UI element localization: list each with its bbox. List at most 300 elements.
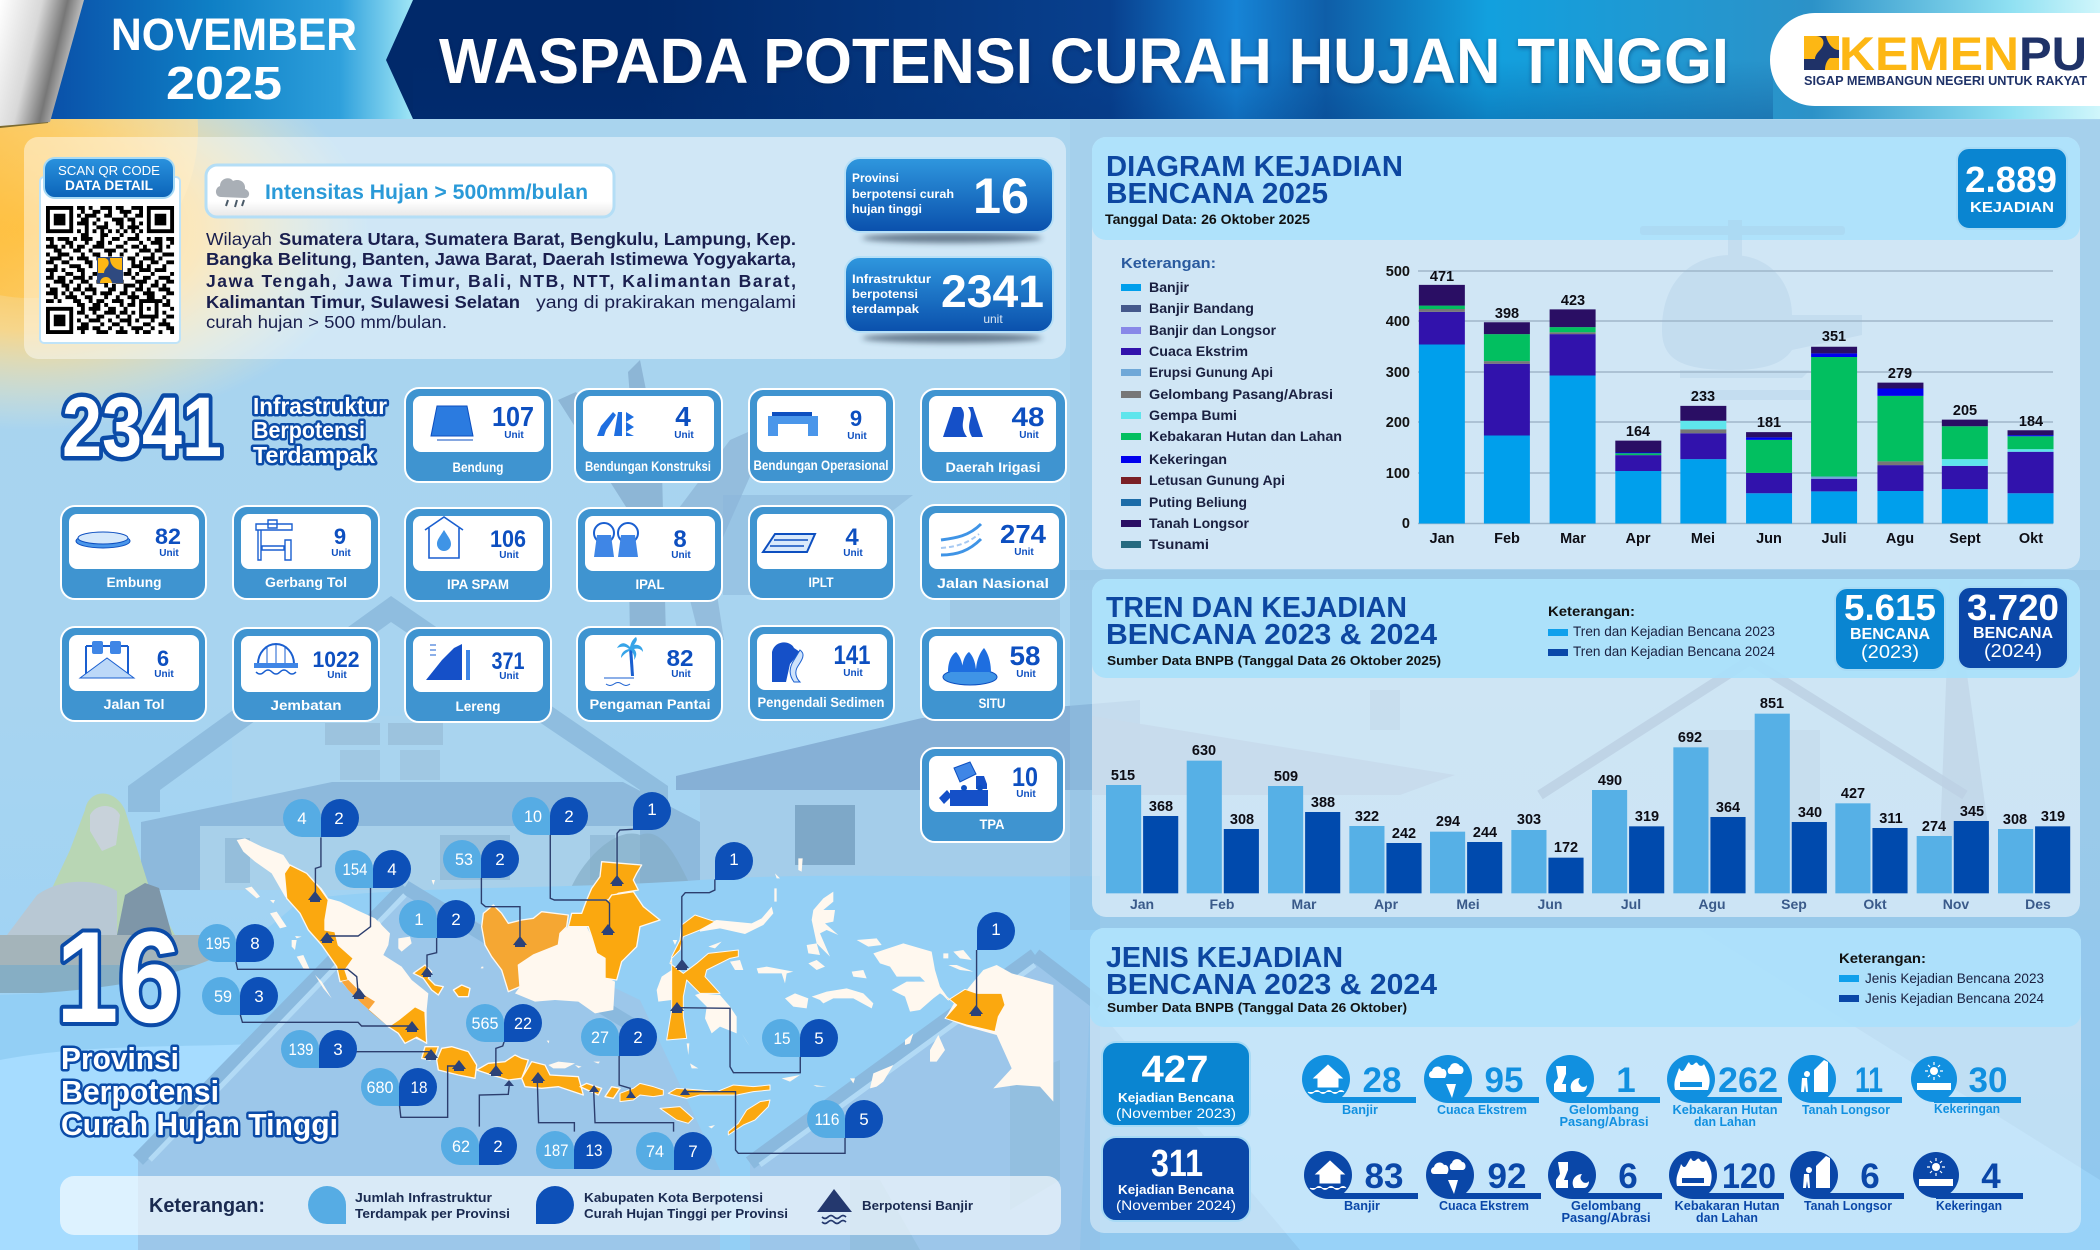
text: affected provinces: yang di prakirakan mengalami: [536, 292, 796, 312]
month block: [45, 0, 413, 119]
badge: 427 November 2023: Kejadian Bencana: [1118, 1090, 1235, 1105]
card: Lereng: Unit: [499, 671, 519, 682]
heading: Tanggal Data: 26 Oktober 2025: [1105, 211, 1310, 227]
pin: 187/13: 187: [544, 1141, 568, 1160]
legend: Keterangan:: [1839, 950, 1926, 966]
month labels: Feb: [1210, 896, 1234, 912]
card: Pengendali Sedimen: [749, 626, 894, 720]
item: Cuaca Ekstrem 2024: [1426, 1151, 1541, 1213]
legend: flood icon: [817, 1189, 973, 1224]
card: IPAL: Unit: [671, 550, 691, 561]
pin: 139/3: [281, 1030, 357, 1068]
legend: Gelombang Pasang/Abrasi: [1149, 386, 1333, 402]
card: Bendung: [405, 388, 552, 482]
item: Banjir 2024: Banjir: [1344, 1199, 1380, 1213]
icon: storm clouds: [1431, 1159, 1466, 1194]
card: IPLT: 4: [845, 524, 859, 551]
item: Gelombang Pasang/Abrasi 2023: Pasang/Abrasi: [1560, 1115, 1648, 1129]
badge: 427 November 2023: 427: [1142, 1049, 1208, 1091]
item: Cuaca Ekstrem 2023: [1424, 1055, 1539, 1117]
QR code: [46, 206, 174, 334]
item: Tanah Longsor 2023: [1788, 1055, 1902, 1117]
item: Kekeringan 2023: Kekeringan: [1934, 1102, 2000, 1116]
text: affected provinces: Jawa Tengah, Jawa Timur, Bali, NTB, NTT, Kalimantan Barat,: [206, 271, 796, 291]
card: SITU: [921, 628, 1064, 720]
stat card: 2341 infrastruktur: terdampak: [852, 302, 919, 316]
card: TPA: Unit: [1016, 789, 1036, 800]
heading: [1106, 592, 1441, 668]
card: Pengaman Pantai: Pengaman Pantai: [590, 697, 710, 712]
value labels: 279: [1888, 366, 1912, 382]
value labels: 515: [1111, 768, 1135, 784]
card: IPAL: [577, 508, 722, 601]
badge: 311 November 2024: Kejadian Bencana: [1118, 1182, 1235, 1197]
western islands: [237, 838, 660, 1098]
legend: [1839, 950, 2044, 1006]
month labels: Des: [2025, 896, 2051, 912]
badge: 311 November 2024: [1102, 1137, 1250, 1221]
item: Kebakaran Hutan 2024: 120: [1722, 1157, 1776, 1196]
item: Kekeringan 2024: 4: [1981, 1157, 2001, 1196]
card: Jalan Tol: Unit: [154, 669, 174, 680]
card: Pengendali Sedimen: Unit: [843, 668, 863, 679]
card: SITU: 58: [1010, 641, 1040, 671]
value labels: 308: [2003, 812, 2027, 828]
badge: 2.889 kejadian: [1957, 148, 2067, 229]
grouped bar chart: [1106, 696, 2070, 912]
item: Kekeringan 2024: [1913, 1152, 2023, 1213]
axis labels: 100: [1386, 466, 1410, 482]
legend: Banjir Bandang: [1149, 300, 1254, 316]
QR card: [40, 158, 180, 343]
pin: 53/2: 53: [455, 850, 473, 869]
heading: 2341 infrastruktur: Berpotensi: [253, 417, 365, 443]
value labels: [1430, 269, 2043, 440]
item: Kekeringan 2024: Kekeringan: [1936, 1199, 2002, 1213]
icon: wave: [1554, 1066, 1587, 1092]
value labels: 851: [1760, 696, 1784, 712]
badge: 3.720: [1958, 587, 2068, 669]
pin: single 1 Sulawesi: 1: [729, 850, 739, 869]
left woman, pets and boat: [0, 935, 227, 993]
value labels: 423: [1561, 293, 1585, 309]
intensity pill: Intensitas Hujan > 500mm/bulan: [265, 181, 588, 204]
card: SITU: SITU: [978, 696, 1006, 711]
icon: dam: [431, 406, 473, 440]
legend: kabupaten kota: [536, 1186, 788, 1224]
heading: [1106, 942, 1437, 1015]
pin: 59/3: 3: [254, 987, 264, 1006]
badge: 3.720: (2024): [1984, 641, 2042, 661]
month labels: Agu: [1698, 896, 1726, 912]
stat card: 16 provinsi: hujan tinggi: [852, 202, 922, 216]
pin: 62/2: 2: [493, 1137, 503, 1156]
legend: Erupsi Gunung Api: [1149, 364, 1273, 380]
heading: [1105, 151, 1403, 227]
item: Kebakaran Hutan 2024: Kebakaran Hutan: [1674, 1199, 1780, 1213]
decorative right side shapes: [1070, 120, 2100, 580]
decorative trees and houses: [558, 360, 666, 640]
badge: 311 November 2024: (November 2024): [1116, 1197, 1236, 1213]
item: Tanah Longsor 2024: [1790, 1151, 1904, 1213]
item: Gelombang Pasang/Abrasi 2024: 6: [1618, 1157, 1638, 1196]
logo: KEMEN: [1839, 27, 2019, 80]
icon: dam construction: [597, 412, 634, 436]
pin: 74/7: 7: [688, 1142, 698, 1161]
pin: 187/13: 13: [586, 1141, 602, 1160]
pin: 15/5: 15: [774, 1029, 790, 1048]
value labels: 364: [1716, 800, 1740, 816]
axis labels: 500: [1386, 264, 1410, 280]
card: Pengaman Pantai: Unit: [671, 669, 691, 680]
card: IPA SPAM: Unit: [499, 550, 519, 561]
panel: diagram kejadian bencana 2025: [1092, 137, 2080, 569]
value labels: 319: [1635, 809, 1659, 825]
item: Tanah Longsor 2024: Tanah Longsor: [1804, 1199, 1892, 1213]
value labels: 172: [1554, 840, 1578, 856]
icon: road: [941, 524, 981, 555]
card: Daerah Irigasi: [921, 389, 1066, 482]
icon: landslide: [1803, 1156, 1830, 1188]
leader lines: [236, 829, 977, 1153]
item: Kekeringan 2023: [1911, 1056, 2021, 1116]
map of Indonesia: [198, 792, 1053, 1170]
faint helicopter: [1640, 220, 1862, 400]
heading: Sumber Data BNPB (Tanggal Data 26 Oktober 2025): [1107, 653, 1441, 668]
badge: 427 November 2023: (November 2023): [1116, 1105, 1236, 1121]
panel header: [1090, 928, 2081, 1027]
axis labels: 300: [1386, 365, 1410, 381]
bars: [1419, 285, 2054, 524]
badge: 311 November 2024: 311: [1151, 1143, 1203, 1185]
item: Banjir 2024: 83: [1364, 1157, 1404, 1196]
legend: Gempa Bumi: [1149, 407, 1237, 423]
card: Jalan Tol: [61, 627, 206, 721]
icon: palm beach: [629, 646, 634, 676]
card: Jalan Nasional: Unit: [1014, 547, 1034, 558]
legend: Banjir dan Longsor: [1149, 322, 1277, 338]
stat card: 2341 infrastruktur: berpotensi: [852, 287, 918, 301]
badge: 5.615: [1835, 587, 1945, 670]
page curl: [0, 0, 84, 128]
pin: 1/2: 1: [414, 910, 424, 929]
legend: Kekeringan: [1149, 451, 1227, 467]
pin: 10/2: 2: [564, 807, 574, 826]
pin: 10/2: [512, 797, 588, 835]
pin: 59/3: 59: [214, 987, 232, 1006]
logo: SIGAP MEMBANGUN NEGERI UNTUK RAKYAT: [1804, 73, 2087, 88]
legend: [1548, 603, 1775, 659]
item: Kekeringan 2023: 30: [1968, 1061, 2008, 1100]
heading: 2341 infrastruktur: [62, 380, 387, 474]
text: affected provinces: curah hujan > 500 mm/bulan.: [206, 312, 447, 332]
card: Gerbang Tol: 9: [334, 524, 346, 549]
month labels: Mar: [1292, 896, 1317, 912]
stat card: 16 provinsi: 16: [973, 168, 1029, 224]
icon: rain cloud: [216, 178, 249, 207]
stat card: 2341 infrastruktur: Infrastruktur: [852, 272, 931, 286]
pin: 10/2: 10: [524, 807, 542, 826]
item: Gelombang Pasang/Abrasi 2023: 1: [1616, 1061, 1636, 1100]
panel: jenis kejadian bencana: [1090, 928, 2081, 1233]
pin: single 1 Kaltim: 1: [647, 800, 657, 819]
month labels: Sept: [1949, 531, 1981, 547]
item: Kebakaran Hutan 2024: dan Lahan: [1696, 1211, 1758, 1225]
panel header: [1092, 579, 2080, 678]
value labels: 233: [1691, 389, 1715, 405]
month labels: Sep: [1781, 896, 1807, 912]
logo: [1770, 13, 2100, 106]
badge: 5.615: 5.615: [1844, 587, 1936, 628]
flood markers: [308, 875, 983, 1098]
card: Jembatan: Jembatan: [270, 698, 342, 713]
item: Cuaca Ekstrem 2023: 95: [1484, 1061, 1524, 1100]
value labels: 294: [1436, 814, 1460, 830]
stat card: 2341 infrastruktur: unit: [983, 312, 1003, 326]
card: Jembatan: [233, 628, 379, 721]
pin: 53/2: 2: [495, 850, 505, 869]
item: Gelombang Pasang/Abrasi 2023: [1546, 1055, 1660, 1129]
month block: NOVEMBER: [111, 9, 357, 60]
card: TPA: TPA: [980, 817, 1005, 832]
pin: 1/2: [399, 900, 475, 938]
card: Pengaman Pantai: 82: [666, 645, 694, 671]
card: Pengendali Sedimen: Pengendali Sedimen: [758, 695, 884, 710]
card: Jalan Tol: Jalan Tol: [104, 697, 164, 712]
row: jenis kejadian 2024: [1304, 1151, 2023, 1225]
card: Bendungan Konstruksi: Unit: [674, 430, 694, 441]
card: Bendungan Konstruksi: [575, 389, 722, 482]
card: Lereng: 371: [492, 648, 524, 675]
pin: 27/2: 2: [633, 1028, 643, 1047]
card: Daerah Irigasi: Unit: [1019, 430, 1039, 441]
value labels: 340: [1798, 805, 1822, 821]
pin: single 1 Papua: [977, 912, 1015, 950]
item: Kebakaran Hutan 2023: Kebakaran Hutan: [1672, 1103, 1778, 1117]
icon: operating dam: [768, 416, 818, 436]
icon: sludge plant: [763, 534, 815, 552]
pin: Sumut 4/2: 4: [297, 809, 307, 828]
item: Tanah Longsor 2024: 6: [1860, 1157, 1880, 1196]
pin: 15/5: 5: [814, 1029, 824, 1048]
item: Banjir 2024: [1304, 1151, 1418, 1213]
icon: sediment control: [772, 642, 800, 682]
flood water: [0, 876, 1100, 1250]
item: Banjir 2023: Banjir: [1342, 1103, 1378, 1117]
card: Jalan Tol: 6: [157, 646, 169, 671]
heading: 2341 infrastruktur: 2341: [62, 380, 222, 474]
value labels: 490: [1598, 773, 1622, 789]
legend: Letusan Gunung Api: [1149, 472, 1285, 488]
card: Bendungan Operasional: Bendungan Operasional: [754, 458, 888, 473]
text: affected provinces: [206, 229, 796, 332]
legend: Keterangan:: [1548, 603, 1635, 619]
month labels: Jul: [1621, 896, 1641, 912]
value labels: 181: [1757, 415, 1781, 431]
icon: lake with trees: [943, 669, 997, 685]
pin: 680/18: 18: [410, 1078, 428, 1097]
pin: 116/5: 116: [814, 1110, 840, 1129]
card: Embung: [61, 506, 206, 599]
pin: 154/4: [335, 850, 411, 888]
legend: Banjir: [1149, 279, 1190, 295]
icon: forest fire: [1674, 1062, 1710, 1090]
axis labels: [1386, 264, 1410, 532]
text: affected provinces: Wilayah: [206, 229, 272, 249]
stat card: 16 provinsi: berpotensi curah: [852, 187, 954, 201]
item: Cuaca Ekstrem 2023: Cuaca Ekstrem: [1437, 1103, 1527, 1117]
card: IPA SPAM: 106: [490, 526, 526, 553]
card: IPAL: 8: [673, 526, 687, 553]
stacked bar chart: [1386, 264, 2054, 547]
card: Pengaman Pantai: [577, 627, 722, 721]
map legend: [60, 1176, 1061, 1235]
QR card: DATA DETAIL: [65, 178, 153, 193]
QR centre mark: [97, 257, 123, 283]
value labels: 630: [1192, 743, 1216, 759]
item: Gelombang Pasang/Abrasi 2024: Pasang/Abrasi: [1562, 1211, 1650, 1225]
pin: 53/2: [443, 840, 519, 878]
stat card: 2341 infrastruktur: 2341: [941, 266, 1044, 317]
axis labels: 200: [1386, 415, 1410, 431]
pin: 565/22: [466, 1004, 542, 1042]
card: Bendung: 107: [492, 401, 534, 432]
month labels: [1130, 896, 2051, 912]
legend: infrastruktur: Terdampak per Provinsi: [355, 1206, 510, 1221]
card: Lereng: Lereng: [456, 699, 500, 714]
pin: 59/3: [202, 977, 278, 1015]
heading: 16 provinsi: [56, 904, 338, 1142]
legend: Kebakaran Hutan dan Lahan: [1149, 428, 1342, 444]
month labels: Jan: [1130, 896, 1154, 912]
pin: 15/5: [762, 1019, 838, 1057]
value labels: 184: [2019, 414, 2043, 430]
legend: Jenis Kejadian Bencana 2024: [1865, 990, 2044, 1006]
value labels: 471: [1430, 269, 1454, 285]
icon: storm clouds: [1429, 1063, 1464, 1098]
card: Embung: 82: [155, 524, 181, 549]
pin: 116/5: [807, 1100, 883, 1138]
item: Tanah Longsor 2023: Tanah Longsor: [1802, 1103, 1890, 1117]
pin: single 1 Kaltim: [633, 792, 671, 830]
value labels: 398: [1495, 306, 1519, 322]
month labels: Okt: [1863, 896, 1887, 912]
badge: 2.889 kejadian: KEJADIAN: [1970, 199, 2054, 216]
heading: BENCANA 2023 & 2024: [1106, 619, 1437, 651]
legend: kabupaten kota: Curah Hujan Tinggi per Provinsi: [584, 1206, 788, 1221]
pin: Sumut 4/2: [283, 799, 359, 837]
legend: kabupaten kota: Kabupaten Kota Berpotensi: [584, 1190, 763, 1205]
QR card: SCAN QR CODE: [58, 163, 160, 178]
value labels: 427: [1841, 786, 1865, 802]
card: Jembatan: 1022: [312, 647, 360, 672]
value labels: 244: [1473, 825, 1497, 841]
pin: 565/22: 22: [514, 1014, 532, 1033]
pin: 74/7: [636, 1132, 712, 1170]
header bar: [0, 0, 2100, 128]
pin: 27/2: [581, 1018, 657, 1056]
heading: DIAGRAM KEJADIAN: [1106, 151, 1403, 183]
icon: slope: [426, 644, 462, 680]
heading: 16 provinsi: 16: [56, 904, 181, 1050]
card: Jalan Nasional: [921, 505, 1066, 599]
pin: 62/2: 62: [452, 1137, 470, 1156]
card: IPLT: [749, 506, 894, 599]
item: Cuaca Ekstrem 2024: 92: [1488, 1157, 1526, 1196]
card: Bendungan Operasional: 9: [850, 406, 862, 431]
item: Kebakaran Hutan 2023: dan Lahan: [1694, 1115, 1756, 1129]
item: Banjir 2023: 28: [1362, 1061, 1402, 1100]
icon: toll road: [86, 646, 128, 676]
value labels: 368: [1149, 799, 1173, 815]
card: Embung: Unit: [159, 548, 179, 559]
card: IPLT: Unit: [843, 548, 863, 559]
month labels: Mei: [1456, 896, 1480, 912]
stat card: 2341 infrastruktur: [845, 257, 1053, 343]
pin: 62/2: [441, 1127, 517, 1165]
pin: 154/4: 154: [342, 860, 368, 879]
value labels: 351: [1822, 329, 1846, 345]
month labels: [1430, 531, 2043, 547]
card: Bendung: Bendung: [452, 460, 504, 475]
stat card: 16 provinsi: [845, 158, 1053, 243]
card: IPA SPAM: [405, 508, 551, 601]
legend: Cuaca Ekstrim: [1149, 343, 1248, 359]
legend: Tren dan Kejadian Bencana 2024: [1573, 643, 1775, 659]
badge: 2.889 kejadian: 2.889: [1965, 159, 2057, 200]
icon: ministry mark: [1804, 36, 1839, 70]
legend: flood icon: Berpotensi Banjir: [862, 1198, 973, 1213]
value labels: 164: [1626, 424, 1650, 440]
heading: TREN DAN KEJADIAN: [1106, 592, 1407, 624]
icon: forest fire: [1676, 1158, 1712, 1186]
value labels: 242: [1392, 826, 1416, 842]
legend: Tren dan Kejadian Bencana 2023: [1573, 623, 1775, 639]
item: Gelombang Pasang/Abrasi 2024: [1548, 1151, 1662, 1225]
month labels: Mei: [1691, 531, 1715, 547]
stat card: 16 provinsi: Provinsi: [852, 171, 899, 185]
card: Gerbang Tol: Unit: [331, 548, 351, 559]
value labels: 345: [1960, 804, 1984, 820]
value labels: 319: [2041, 809, 2065, 825]
month labels: Jun: [1756, 531, 1782, 547]
pin: 195/8: 195: [206, 934, 230, 953]
legend: [1121, 255, 1342, 552]
heading: JENIS KEJADIAN: [1106, 942, 1343, 974]
icon: pond: [76, 534, 130, 548]
card: SITU: Unit: [1016, 669, 1036, 680]
card: Daerah Irigasi: Daerah Irigasi: [946, 460, 1040, 475]
pin: 27/2: 27: [591, 1028, 609, 1047]
icon: irrigation: [943, 407, 983, 437]
heading: BENCANA 2025: [1106, 178, 1328, 210]
pin: Sumut 4/2: 2: [334, 809, 344, 828]
card: Embung: Embung: [106, 575, 162, 590]
badge: 3.720: 3.720: [1967, 587, 2059, 628]
heading: 2341 infrastruktur: Infrastruktur: [253, 393, 387, 419]
legend: Jenis Kejadian Bencana 2023: [1865, 970, 2044, 986]
item: Gelombang Pasang/Abrasi 2024: Gelombang: [1571, 1199, 1641, 1213]
card: Bendungan Operasional: Unit: [847, 431, 867, 442]
pin: single 1 Papua: 1: [991, 920, 1001, 939]
panel header: [1092, 137, 2080, 240]
card: TPA: [921, 748, 1064, 842]
card: Bendungan Konstruksi: Bendungan Konstruksi: [585, 459, 711, 474]
icon: landslide: [1801, 1060, 1828, 1092]
panel: tren dan kejadian bencana: [1092, 579, 2080, 917]
value labels: 388: [1311, 795, 1335, 811]
heading: BENCANA 2023 & 2024: [1106, 969, 1437, 1001]
